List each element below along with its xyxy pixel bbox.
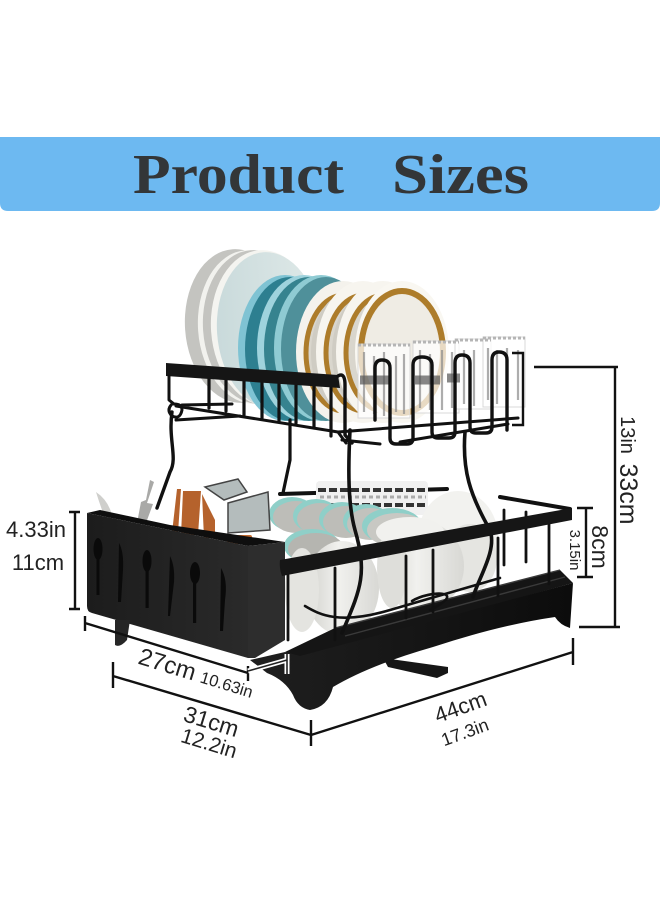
fork [137, 480, 154, 523]
upper rack front bar [166, 363, 340, 388]
caddy inner rim [87, 510, 285, 546]
label 4.33in: 4.33in [6, 517, 66, 542]
dimension: 31 cm width [113, 662, 311, 763]
grey plates [180, 245, 326, 411]
upper rack vertical wires [209, 376, 331, 436]
label 10.63in: 10.63in [198, 669, 255, 702]
white offset bracket [248, 654, 287, 674]
tray body [250, 583, 573, 710]
cutlery caddy [87, 510, 285, 658]
upper rack left post [169, 376, 174, 404]
lower rack back rail [280, 489, 570, 509]
small stacked plates [269, 497, 427, 565]
dimension: 33 cm height [534, 367, 642, 627]
bowls back right [418, 491, 498, 583]
upper tier plates [180, 245, 449, 423]
label 17.3in: 17.3in [438, 715, 491, 750]
upper right bracket mark [512, 353, 523, 425]
upper rack bottom rail [169, 404, 518, 443]
lower tier dishes [269, 491, 498, 635]
label 3.15in: 3.15in [566, 530, 583, 570]
rear foot [383, 658, 448, 678]
spoon and knife cut-outs [94, 538, 226, 631]
drip tray [115, 583, 573, 710]
left foot under caddy [115, 620, 130, 646]
label 44cm: 44cm [431, 686, 490, 728]
title: Product Sizes: Sizes [392, 144, 529, 206]
dimension: 27 cm caddy length [85, 616, 287, 702]
glass holder lower rail [342, 424, 508, 444]
utensils in caddy [96, 479, 270, 544]
gold rim plates [296, 281, 449, 423]
label 11cm: 11cm [12, 550, 64, 575]
label 31cm: 31cm [181, 701, 242, 742]
caddy front face [87, 513, 248, 658]
caddy side face [248, 542, 285, 658]
title: Product Sizes: Product [133, 144, 344, 206]
label 33cm: 33cm [614, 463, 642, 525]
label 8cm: 8cm [587, 525, 613, 569]
wooden utensils [172, 489, 215, 538]
label 12.2in: 12.2in [178, 724, 240, 763]
lower rack wires [288, 510, 549, 640]
knife [96, 492, 118, 520]
label 27cm: 27cm [135, 643, 199, 686]
upper glasses [358, 337, 525, 418]
large front plates [305, 541, 379, 635]
dimension: 44 cm length [311, 638, 573, 750]
metal spatula [205, 479, 270, 533]
lower glasses [316, 481, 428, 515]
label 13in: 13in [616, 416, 638, 454]
orange accessory [227, 535, 252, 544]
teal plates [238, 275, 371, 421]
title banner [0, 137, 660, 211]
tall support wires [157, 412, 492, 633]
dimension: 8 cm rack height [566, 508, 613, 577]
glass holder meander wire [338, 352, 507, 444]
lower rack front bar [280, 508, 572, 576]
dimension: caddy height [6, 512, 80, 609]
upper rack [166, 352, 518, 444]
lower rack floor [285, 570, 573, 658]
